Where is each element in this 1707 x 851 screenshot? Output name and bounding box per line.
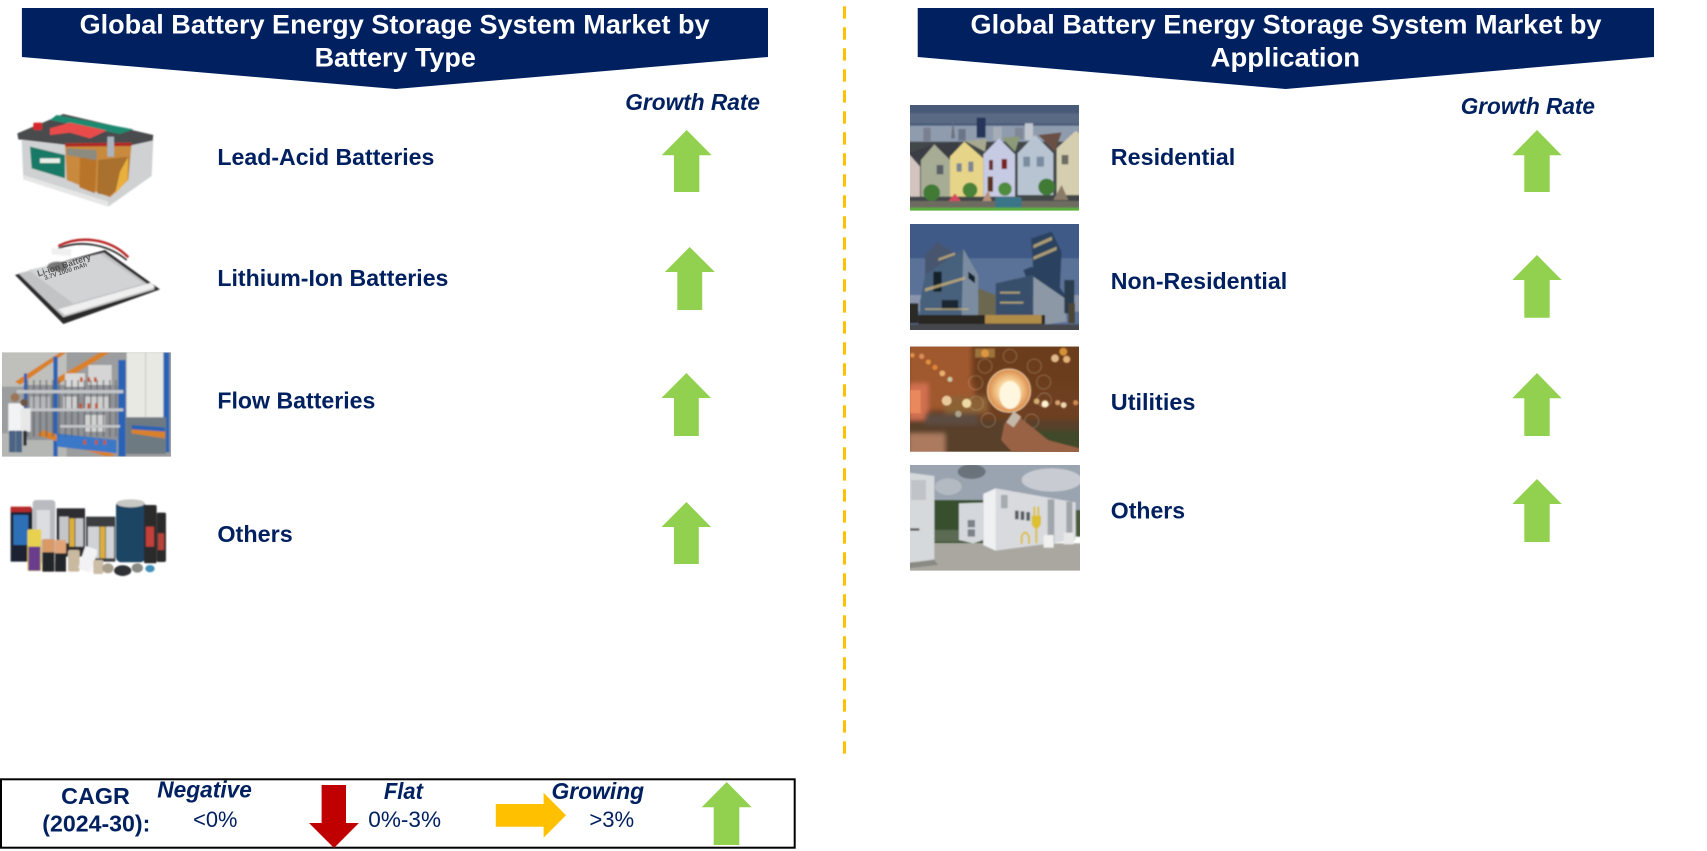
arrow: lead-acid growth up xyxy=(662,130,712,192)
legend item: flat: Flat xyxy=(384,778,424,804)
arrow: green up xyxy=(702,782,752,845)
legend item: negative xyxy=(157,776,252,832)
label: residential: Residential xyxy=(1111,144,1235,170)
label: utilities: Utilities xyxy=(1111,389,1195,415)
arrow: yellow right xyxy=(496,793,566,838)
banner heading: application xyxy=(918,8,1654,89)
divider: dashed vertical line xyxy=(843,6,846,754)
legend item: growing xyxy=(552,778,644,832)
arrow: other applications growth up xyxy=(1512,479,1562,542)
image: battery storage containers xyxy=(908,463,1082,573)
arrow: utilities growth up xyxy=(1512,373,1562,436)
arrow: flow batteries growth up xyxy=(662,373,711,436)
image: flow battery installation xyxy=(0,350,173,460)
banner heading: battery type: Battery Type xyxy=(315,42,476,72)
arrow: lithium-ion growth up xyxy=(665,247,715,310)
text on battery image: Li-ion Battery xyxy=(36,252,92,279)
panel: market by battery type xyxy=(0,8,768,576)
arrow: residential growth up xyxy=(1512,130,1562,192)
legend item: flat: 0%-3% xyxy=(368,807,441,832)
column heading: growth rate: Growth Rate xyxy=(1461,93,1595,119)
label: lead-acid batteries: Lead-Acid Batteries xyxy=(217,144,434,170)
legend: CAGR key xyxy=(1,776,795,848)
banner heading: battery type: Global Battery Energy Storage System Market by xyxy=(80,10,710,40)
label: lithium-ion batteries: Lithium-Ion Batteries xyxy=(217,265,448,291)
banner heading: application: Global Battery Energy Storage System Market by xyxy=(970,10,1602,40)
image: light bulb utilities xyxy=(908,343,1082,457)
image: lead-acid battery xyxy=(17,114,153,207)
column heading: growth rate: Growth Rate xyxy=(625,89,760,115)
legend title: CAGR xyxy=(42,783,150,836)
arrow: other batteries growth up xyxy=(662,502,711,564)
label: others (application): Others xyxy=(1111,498,1185,524)
banner heading: application: Application xyxy=(1211,42,1360,72)
legend item: growing: >3% xyxy=(589,807,634,832)
banner heading: battery type xyxy=(22,8,768,89)
label: non-residential: Non-Residential xyxy=(1111,268,1287,294)
legend item: negative: <0% xyxy=(193,807,237,832)
legend item: negative: Negative xyxy=(157,776,252,802)
label: others (battery type): Others xyxy=(217,521,293,547)
image: lithium-ion battery xyxy=(15,240,160,324)
image: residential houses xyxy=(908,103,1082,212)
text on battery image: 3.7V 1000 mAh xyxy=(43,261,88,282)
label: flow batteries: Flow Batteries xyxy=(217,387,375,413)
legend title: CAGR: CAGR xyxy=(61,783,130,809)
panel: market by application xyxy=(908,8,1654,573)
image: non-residential buildings xyxy=(908,222,1082,332)
legend title: CAGR: (2024-30): xyxy=(42,810,150,836)
arrow: non-residential growth up xyxy=(1512,255,1562,318)
arrow: red down xyxy=(309,785,359,848)
legend item: flat xyxy=(368,778,441,832)
image: assorted batteries xyxy=(11,499,166,576)
legend item: growing: Growing xyxy=(552,778,644,804)
